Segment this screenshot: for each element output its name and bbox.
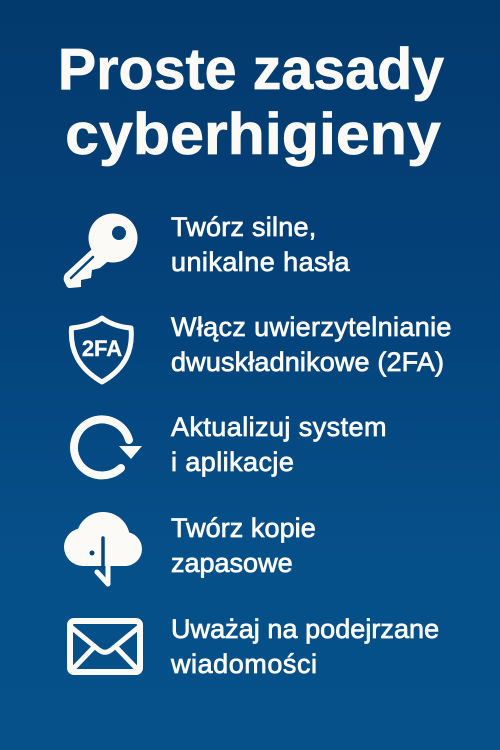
text: suspicious messages: wiadomości	[171, 649, 318, 679]
text: strong passwords	[171, 212, 350, 277]
text: two-factor authentication: dwuskładnikowe (2FA)	[171, 347, 444, 377]
icon: cloud backup	[64, 512, 142, 584]
title	[58, 37, 444, 167]
text: backups: zapasowe	[171, 548, 293, 578]
text: updates: i aplikacje	[171, 447, 294, 477]
text: suspicious messages: Uważaj na podejrzane	[171, 614, 439, 644]
text: two-factor authentication	[170, 312, 452, 377]
title: cyberhigieny	[65, 102, 441, 167]
icon: 2FA shield: 2FA	[82, 336, 122, 361]
text: strong passwords: unikalne hasła	[171, 247, 350, 277]
text: backups: Twórz kopie	[171, 513, 316, 543]
icon: 2FA shield	[71, 318, 131, 382]
text: strong passwords: Twórz silne,	[171, 212, 317, 242]
icon: refresh arrow	[74, 419, 142, 475]
text: backups	[171, 513, 316, 578]
text: suspicious messages	[170, 614, 439, 679]
icon: key	[64, 214, 137, 288]
title: Proste zasady	[58, 37, 444, 102]
text: updates: Aktualizuj system	[171, 412, 387, 442]
text: updates	[170, 412, 387, 477]
text: two-factor authentication: Włącz uwierzytelnianie	[171, 312, 452, 342]
icon: envelope	[70, 621, 140, 672]
